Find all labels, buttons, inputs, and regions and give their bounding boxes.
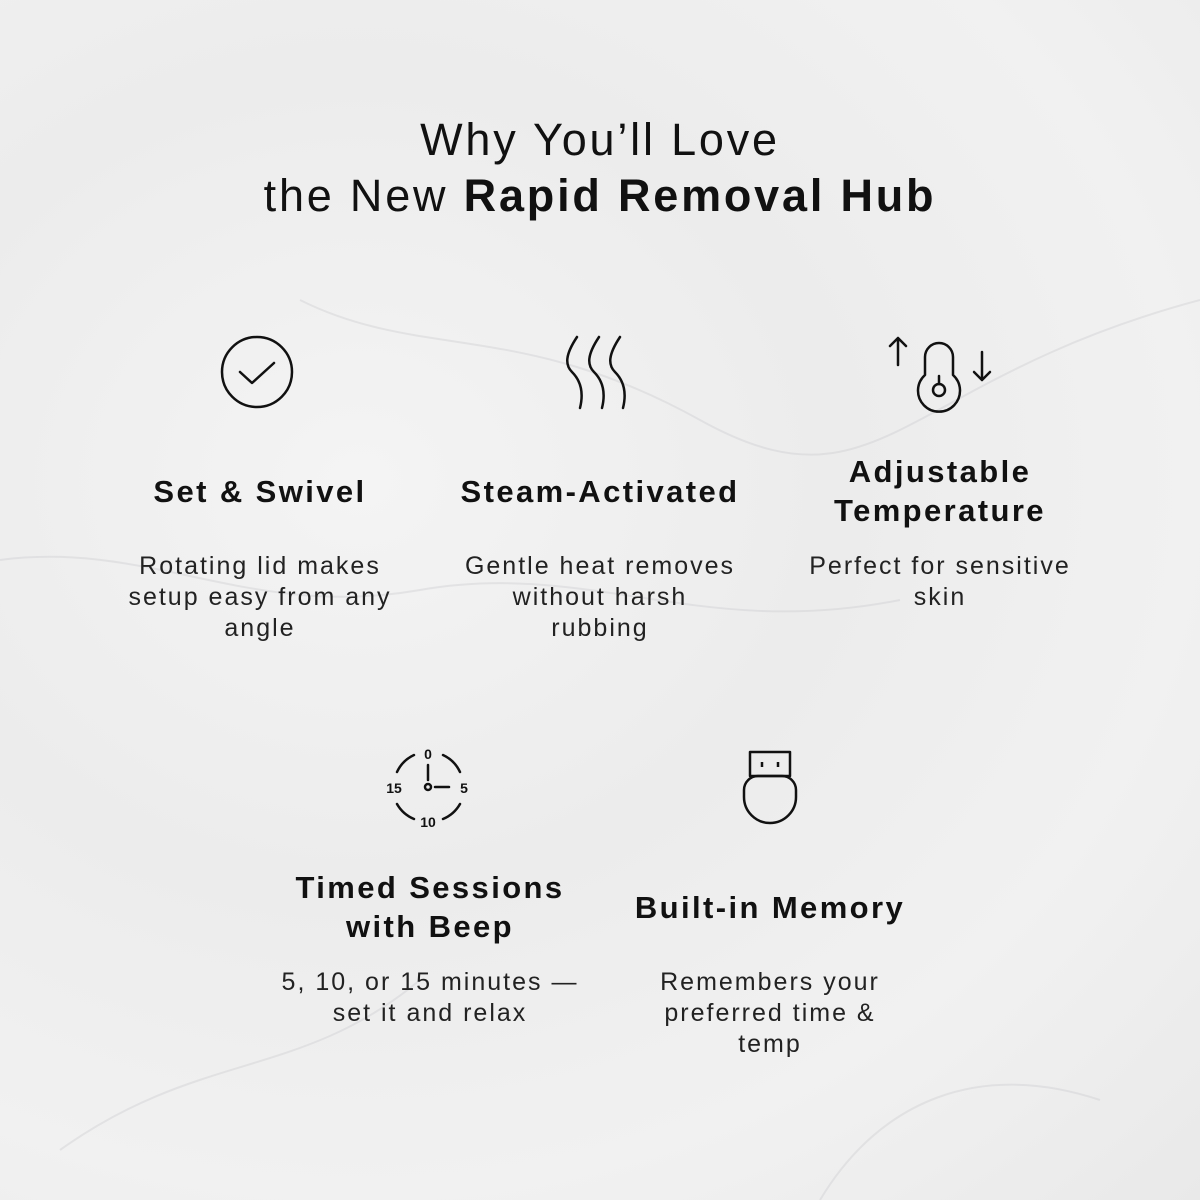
heading: set & swivel: Set & Swivel <box>153 474 367 509</box>
text: steam: rubbing <box>551 614 649 642</box>
icon: timer: 0 <box>424 746 432 762</box>
title: Why You’ll Love <box>420 114 780 165</box>
text: timed: set it and relax <box>333 999 527 1027</box>
text: temperature: Perfect for sensitive skin <box>809 552 1071 611</box>
heading: temperature: Temperature <box>834 493 1046 528</box>
heading: timed <box>295 870 565 944</box>
heading: memory: Built-in Memory <box>635 890 905 925</box>
title <box>264 114 936 221</box>
text: steam: Gentle heat removes <box>465 552 735 580</box>
heading: timed: with Beep <box>346 909 514 944</box>
icon: timer: 5 <box>460 780 468 796</box>
text: steam <box>465 552 735 642</box>
title: the New Rapid Removal Hub <box>264 170 936 221</box>
text: set & swivel: Rotating lid makes setup easy from any angle <box>128 552 392 642</box>
heading: steam: Steam-Activated <box>461 474 739 509</box>
icon: timer: 15 <box>386 780 402 796</box>
text: timed <box>282 968 578 1027</box>
heading: temperature: Adjustable <box>849 454 1031 489</box>
text: memory: Remembers your preferred time & temp <box>660 968 880 1058</box>
text: timed: 5, 10, or 15 minutes — <box>282 968 578 996</box>
text: steam: without harsh <box>513 583 687 611</box>
icon: timer: 10 <box>420 814 436 830</box>
heading: timed: Timed Sessions <box>295 870 565 905</box>
heading: temperature <box>834 454 1046 528</box>
